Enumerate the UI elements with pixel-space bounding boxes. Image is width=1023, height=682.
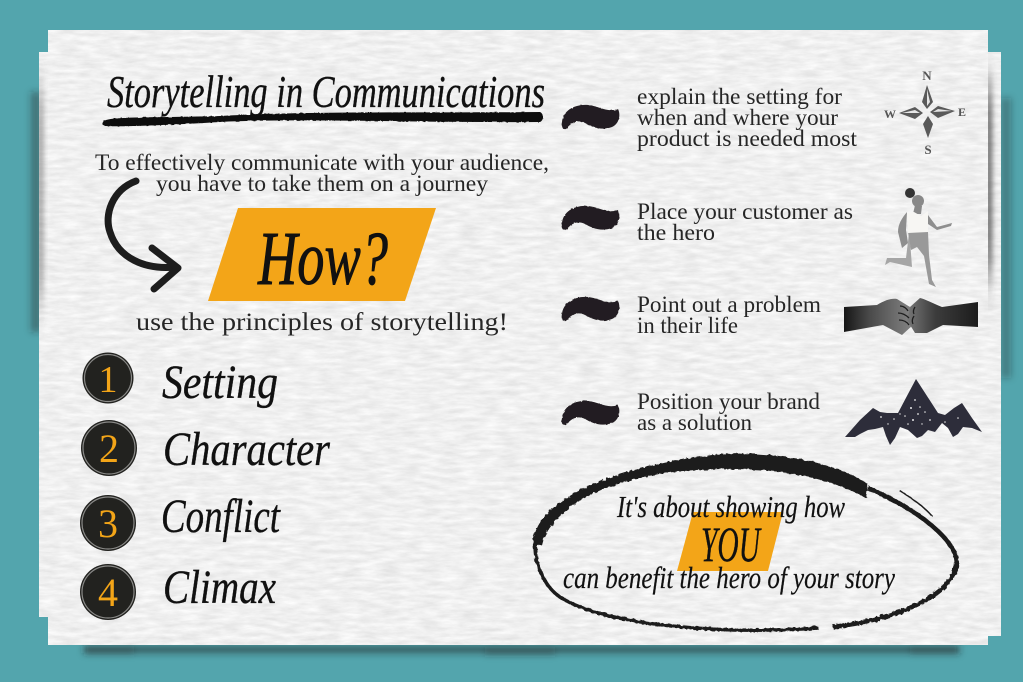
text block: when and where your xyxy=(637,105,838,130)
text block: Place your customer as xyxy=(637,199,853,224)
label: setting: Setting xyxy=(162,356,278,409)
shadow strip on the left paper edge xyxy=(38,90,43,300)
you word: YOU xyxy=(701,516,762,572)
callout line one: It's about showing how xyxy=(616,489,845,524)
title: Storytelling in Communications xyxy=(107,67,545,117)
text block: in their life xyxy=(637,313,738,338)
icon: brush tilde xyxy=(562,401,619,425)
number badge 4: 4 xyxy=(98,570,118,615)
icon: brush tilde xyxy=(562,297,619,321)
icon: fist bump xyxy=(844,298,978,335)
icon: compass: W xyxy=(884,107,896,121)
label: character: Character xyxy=(163,423,330,476)
number badge 2 xyxy=(81,420,137,476)
number badge 3: 3 xyxy=(98,501,118,546)
intro text xyxy=(95,150,549,196)
text block xyxy=(637,292,821,338)
icon: compass xyxy=(884,68,966,157)
intro text: you have to take them on a journey xyxy=(156,171,489,196)
label: conflict: Conflict xyxy=(161,490,281,543)
icon: compass: E xyxy=(958,105,966,119)
icon: mountains xyxy=(845,379,982,445)
icon: curved arrow xyxy=(108,181,178,289)
title underline brush stroke xyxy=(102,112,543,126)
you highlight xyxy=(677,512,783,571)
icon: running figure xyxy=(885,188,952,287)
how callout: How? xyxy=(257,217,388,301)
number badge 1: 1 xyxy=(98,359,118,401)
row: solution xyxy=(562,379,982,445)
number badge 1 xyxy=(82,352,134,404)
title xyxy=(102,67,545,126)
row: problem xyxy=(562,292,978,338)
text block xyxy=(637,84,858,151)
callout: brush circle xyxy=(533,454,957,630)
row: customer hero xyxy=(562,188,952,287)
text block xyxy=(637,389,820,435)
brush circle strokes xyxy=(533,454,957,630)
principles line: use the principles of storytelling! xyxy=(136,309,508,336)
label: climax: Climax xyxy=(163,561,276,614)
number badge 4 xyxy=(80,564,136,620)
how callout xyxy=(208,208,436,301)
callout line two: can benefit the hero of your story xyxy=(563,560,895,595)
text block: explain the setting for xyxy=(637,84,842,109)
text block xyxy=(637,199,853,245)
icon: compass: N xyxy=(922,68,932,83)
row: setting explanation xyxy=(562,68,966,157)
shadow strip on the right paper edge xyxy=(986,85,992,275)
text block: product is needed most xyxy=(637,126,858,151)
paper shadows xyxy=(31,92,1011,655)
number badge 3 xyxy=(80,495,136,551)
intro text: To effectively communicate with your audience, xyxy=(95,150,549,175)
icon: brush tilde xyxy=(562,105,619,129)
list: story principles xyxy=(80,352,330,620)
icon: compass: S xyxy=(924,142,932,157)
text block: the hero xyxy=(637,220,715,245)
number badge 2: 2 xyxy=(99,426,119,471)
text block: Point out a problem xyxy=(637,292,821,317)
text block: Position your brand xyxy=(637,389,820,414)
icon: brush tilde xyxy=(562,206,619,230)
text block: as a solution xyxy=(637,410,752,435)
